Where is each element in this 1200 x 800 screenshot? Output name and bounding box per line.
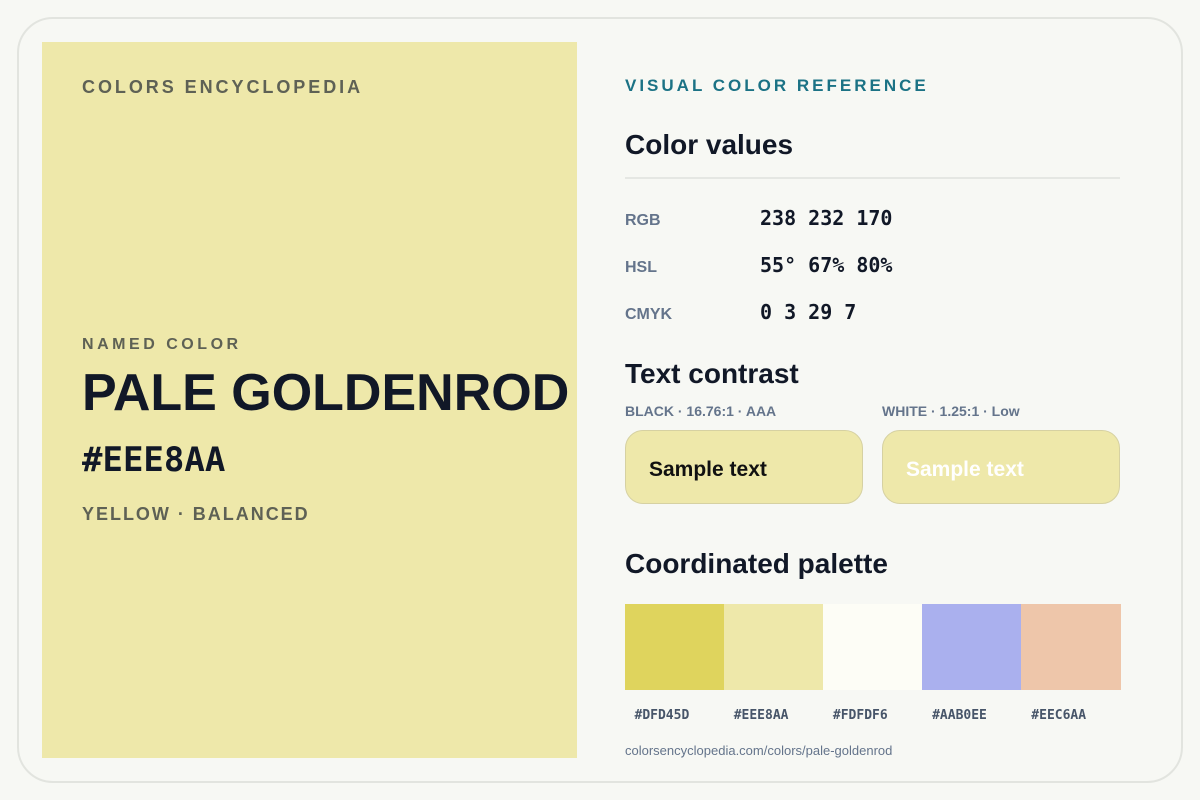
RGB row: RGB	[625, 212, 661, 229]
palette hex labels: #FDFDF6	[833, 708, 888, 723]
black sample: Sample text	[649, 458, 767, 481]
CMYK row	[625, 300, 856, 324]
CMYK row: CMYK	[625, 306, 672, 323]
HSL row	[625, 253, 892, 277]
RGB row	[625, 206, 892, 230]
eyebrow: VISUAL COLOR REFERENCE	[625, 76, 929, 95]
palette hex labels: #AAB0EE	[932, 708, 987, 723]
named color label: NAMED COLOR	[82, 336, 242, 353]
color family: YELLOW · BALANCED	[82, 504, 310, 524]
color name: PALE GOLDENROD	[82, 364, 569, 422]
heading: text contrast: Text contrast	[625, 358, 799, 389]
RGB row: 238 232 170	[760, 206, 892, 230]
heading: Color values	[625, 129, 793, 160]
palette hex labels: #DFD45D	[634, 708, 689, 723]
black contrast caption: BLACK · 16.76:1 · AAA	[625, 403, 776, 419]
palette hex labels: #EEE8AA	[734, 708, 788, 723]
section: color values	[625, 129, 1120, 324]
source url: colorsencyclopedia.com/colors/pale-goldenrod	[625, 743, 892, 758]
panel: color swatch	[42, 42, 577, 758]
palette swatches	[625, 604, 1121, 690]
white sample: Sample text	[906, 458, 1024, 481]
brand label: COLORS ENCYCLOPEDIA	[82, 77, 363, 97]
white sample	[882, 430, 1120, 504]
heading: coordinated palette: Coordinated palette	[625, 548, 888, 579]
white contrast caption: WHITE · 1.25:1 · Low	[882, 403, 1020, 419]
palette hex labels: #EEC6AA	[1031, 708, 1086, 723]
hex value: #EEE8AA	[82, 440, 225, 480]
palette hex labels	[634, 708, 1086, 723]
HSL row: 55° 67% 80%	[760, 253, 892, 277]
black sample	[625, 430, 863, 504]
HSL row: HSL	[625, 259, 657, 276]
CMYK row: 0 3 29 7	[760, 300, 856, 324]
